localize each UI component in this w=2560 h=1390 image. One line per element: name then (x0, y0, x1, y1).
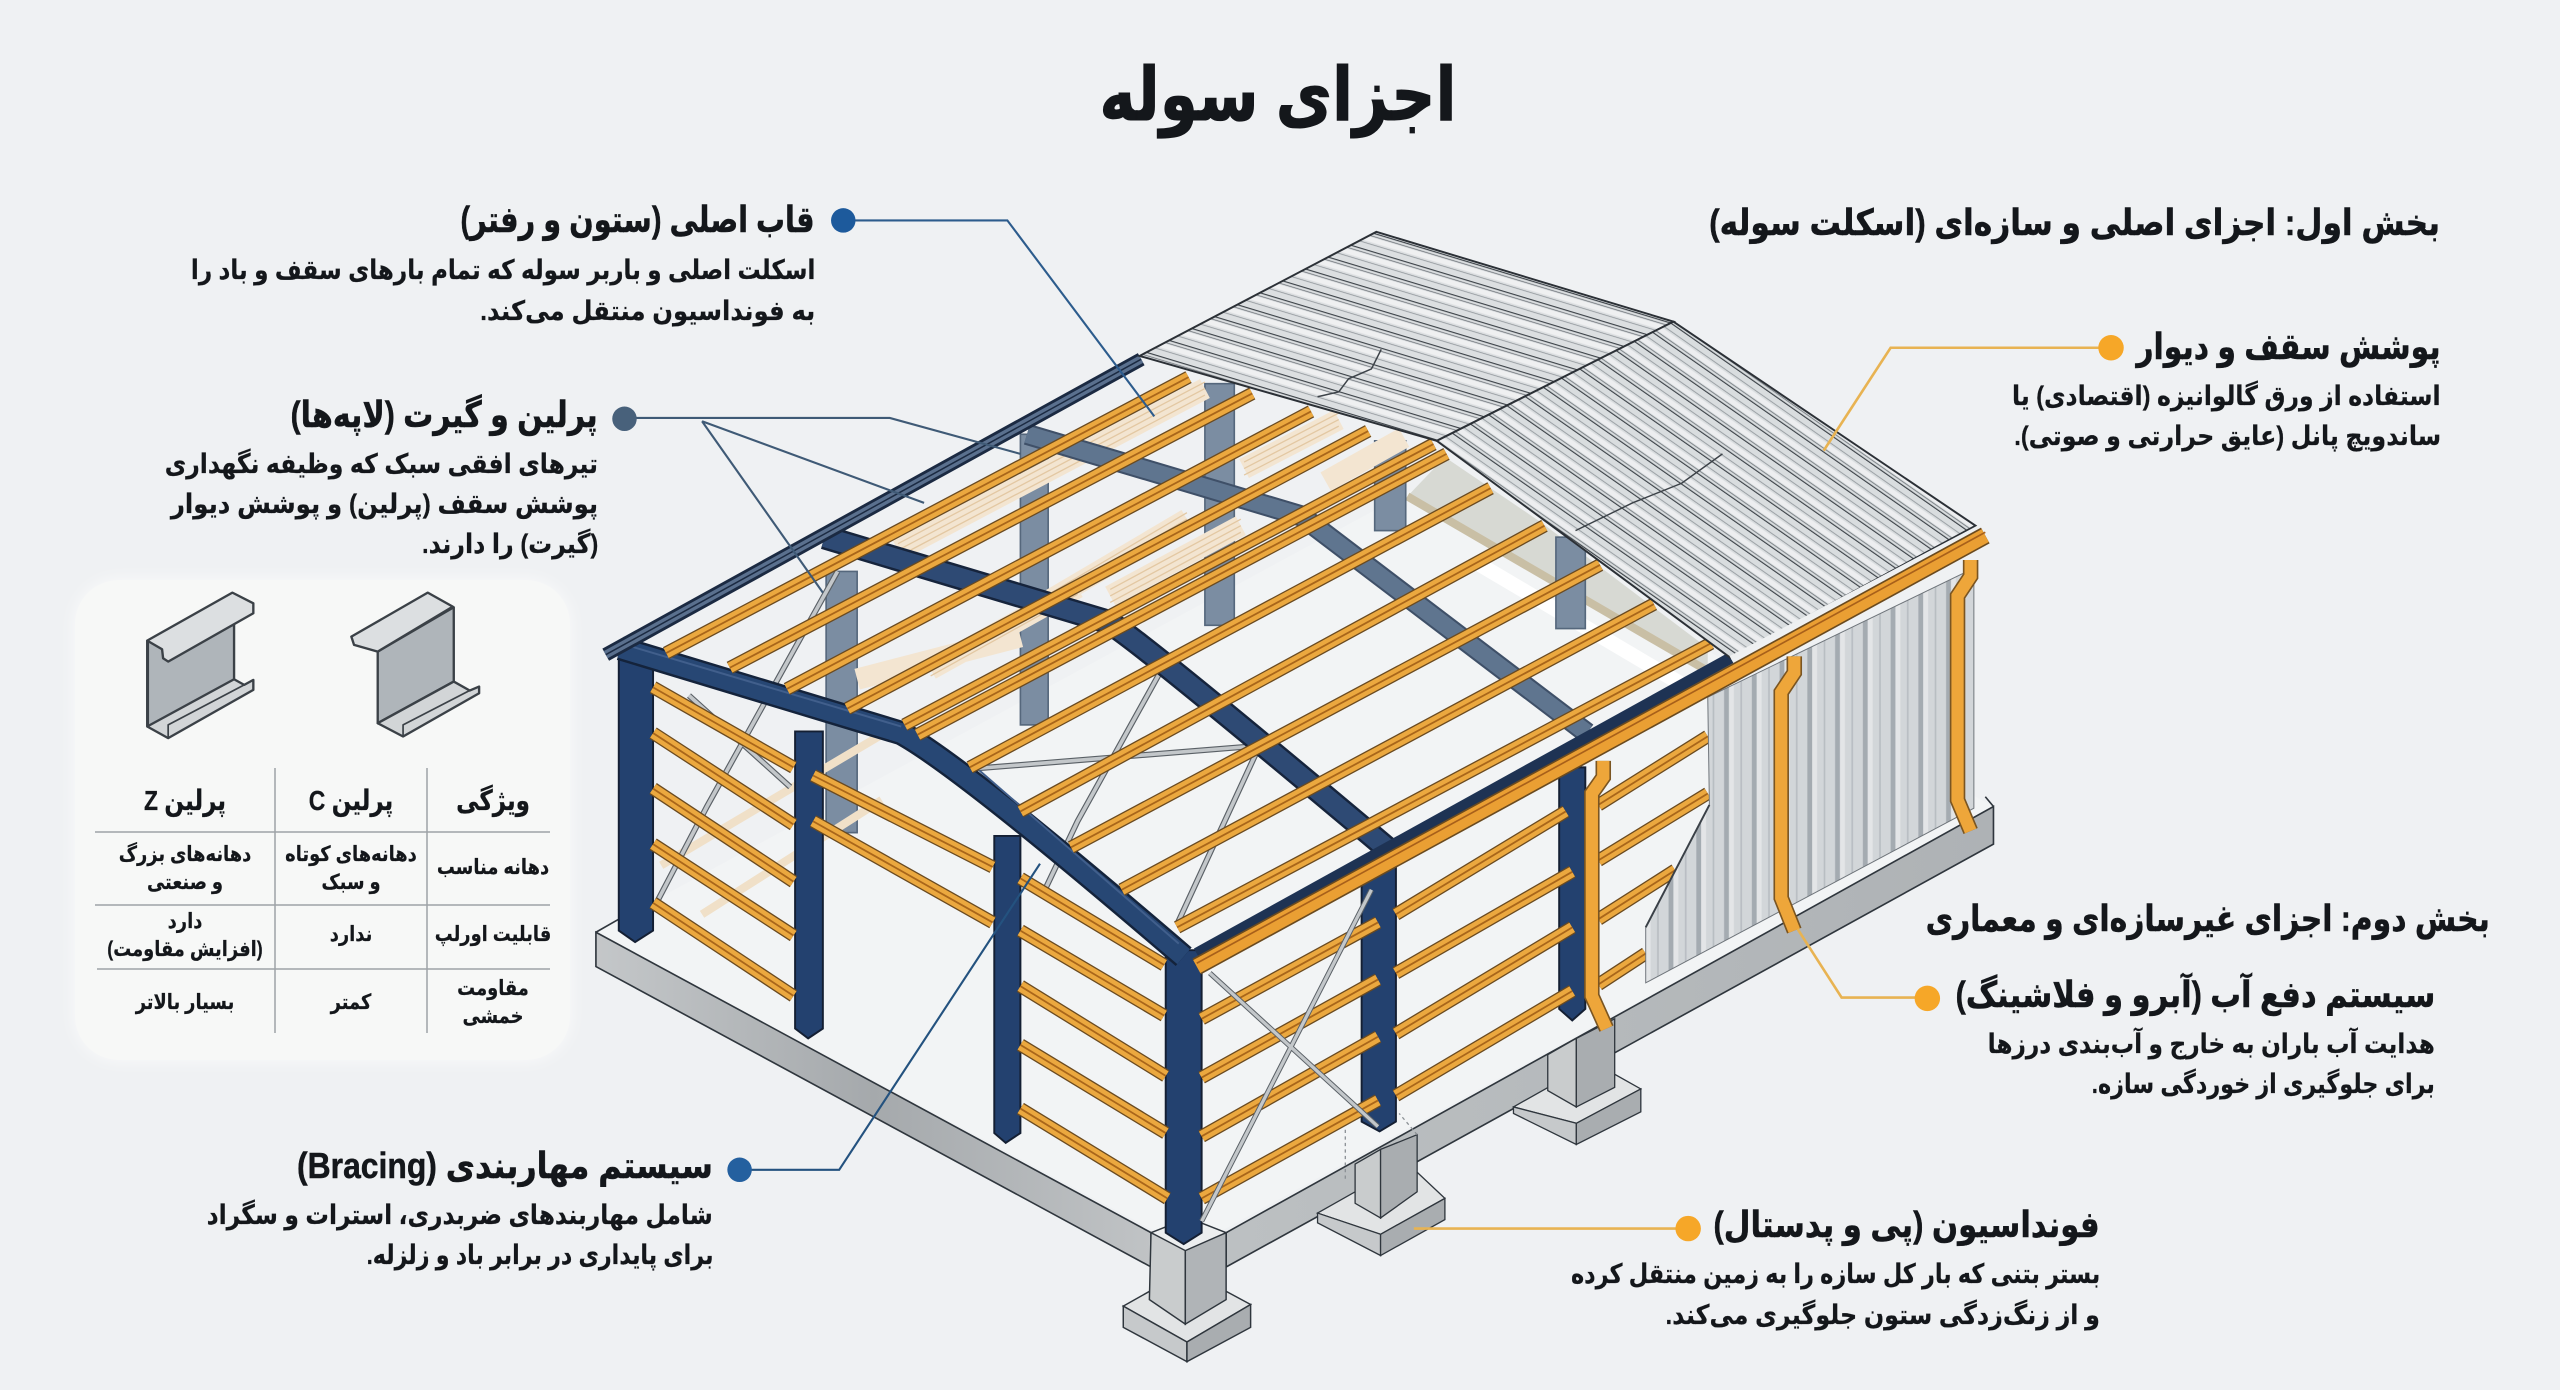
heading: سیستم دفع آب (آبرو و فلاشینگ) (1955, 974, 2435, 1015)
roof panel right slope (1437, 322, 1979, 658)
heading: سیستم مهاربندی (Bracing) (297, 1145, 713, 1186)
table header: feature: ویژگی (456, 785, 530, 816)
body: پوشش سقف (پرلین) و پوشش دیوار (171, 489, 598, 519)
table header: Z purlin: پرلین Z (144, 785, 226, 816)
cell: Z overlap (107, 910, 263, 962)
body (2012, 380, 2441, 452)
leader: purlins (612, 407, 1020, 593)
eave gutter (1197, 532, 1985, 967)
text: main frame (191, 199, 815, 327)
icon: Z purlin (147, 593, 253, 738)
leader: foundation (1414, 1216, 1701, 1241)
body (1988, 1027, 2435, 1100)
body: تیرهای افقی سبک که وظیفه نگهداری (165, 449, 598, 479)
body (191, 255, 815, 327)
body: (گیرت) را دارند. (422, 529, 598, 559)
body: برای جلوگیری از خوردگی سازه. (2092, 1069, 2435, 1099)
pedestal rear (1513, 1019, 1641, 1144)
cell: C span (285, 843, 417, 894)
text: purlin and girt (165, 394, 598, 560)
body: به فونداسیون منتقل می‌کند. (480, 296, 815, 326)
heading: قاب اصلی (ستون و رفتر) (461, 199, 815, 240)
rear columns (826, 384, 1585, 833)
body: برای پایداری در برابر باد و زلزله. (366, 1240, 713, 1270)
body: اسکلت اصلی و باربر سوله که تمام بارهای سقف و باد را (191, 255, 815, 285)
row label: bending (457, 977, 529, 1028)
body: شامل مهاربندهای ضربدری، استرات و سگراد (207, 1200, 713, 1230)
table: purlin comparison (107, 784, 551, 1028)
bracing rods roof and gable (653, 571, 1257, 924)
cell: C overlap: ندارد (330, 923, 372, 946)
leader: roof cover (1824, 335, 2124, 451)
text: foundation (1571, 1204, 2100, 1331)
body (1571, 1259, 2100, 1331)
left eave beam (606, 359, 1141, 655)
leader: main frame (831, 208, 1154, 416)
leader: bracing (727, 864, 1040, 1182)
pedestal middle (1318, 1113, 1445, 1256)
heading: section one: بخش اول: اجزای اصلی و سازه‌ای (اسکلت سوله) (1709, 202, 2440, 243)
cell: Z span (119, 842, 251, 894)
text: bracing (207, 1145, 713, 1271)
body: استفاده از ورق گالوانیزه (اقتصادی) یا (2012, 381, 2441, 411)
leader: drainage (1798, 929, 1940, 1011)
row label: span: دهانه مناسب (437, 856, 549, 879)
heading: پوشش سقف و دیوار (2137, 326, 2441, 367)
row label: bending: خمشی (462, 1005, 524, 1028)
body (207, 1199, 713, 1271)
body: بستر بتنی که بار کل سازه را به زمین منتقل کرده (1571, 1259, 2100, 1289)
text: drainage (1955, 972, 2435, 1100)
body (165, 448, 598, 560)
cell: C span: دهانه‌های کوتاه (285, 843, 417, 866)
body: و از زنگ‌زدگی ستون جلوگیری می‌کند. (1666, 1300, 2100, 1330)
panel: purlin comparison (75, 580, 570, 1060)
pedestal front (1123, 1218, 1251, 1362)
far girts seen through (661, 382, 1404, 914)
title: اجزای سوله (1099, 53, 1457, 136)
cell: C span: و سبک (321, 871, 381, 894)
far wall seen through roof (1407, 457, 1708, 694)
cell: Z span: و صنعتی (147, 871, 223, 894)
steel rafters rear (824, 434, 1587, 849)
cell: C bending: کمتر (331, 991, 371, 1014)
text: roof and wall cover (2012, 326, 2441, 452)
heading: section two: بخش دوم: اجزای غیرسازه‌ای و معماری (1926, 898, 2490, 939)
table header: C purlin: پرلین C (309, 785, 393, 816)
heading: فونداسیون (پی و پدستال) (1714, 1204, 2100, 1245)
wall cladding (1646, 568, 1974, 983)
cell: Z overlap: (افزایش مقاومت) (107, 938, 263, 961)
table grid (95, 768, 550, 1033)
steel rafter front gable (620, 643, 1184, 957)
body: هدایت آب باران به خارج و آب‌بندی درزها (1988, 1029, 2435, 1059)
row label: overlap: قابلیت اورلپ (435, 923, 551, 946)
steel columns (619, 653, 1585, 1244)
bracing rods front wall (1202, 890, 1378, 1221)
roof panel left slope (1140, 232, 1673, 441)
floor slab (596, 490, 1993, 1267)
cell: Z overlap: دارد (168, 910, 202, 933)
downspouts (1592, 560, 1971, 1029)
cell: Z bending: بسیار بالاتر (136, 991, 234, 1014)
cell: Z span: دهانه‌های بزرگ (119, 843, 251, 866)
row label: bending: مقاومت (457, 977, 529, 1000)
wall girts and roof purlins (653, 377, 1711, 1198)
right eave beam (1197, 658, 1731, 953)
body: ساندویچ پانل (عایق حرارتی و صوتی). (2014, 421, 2441, 451)
heading: پرلین و گیرت (لاپه‌ها) (291, 394, 598, 435)
icon: C purlin (351, 593, 479, 736)
